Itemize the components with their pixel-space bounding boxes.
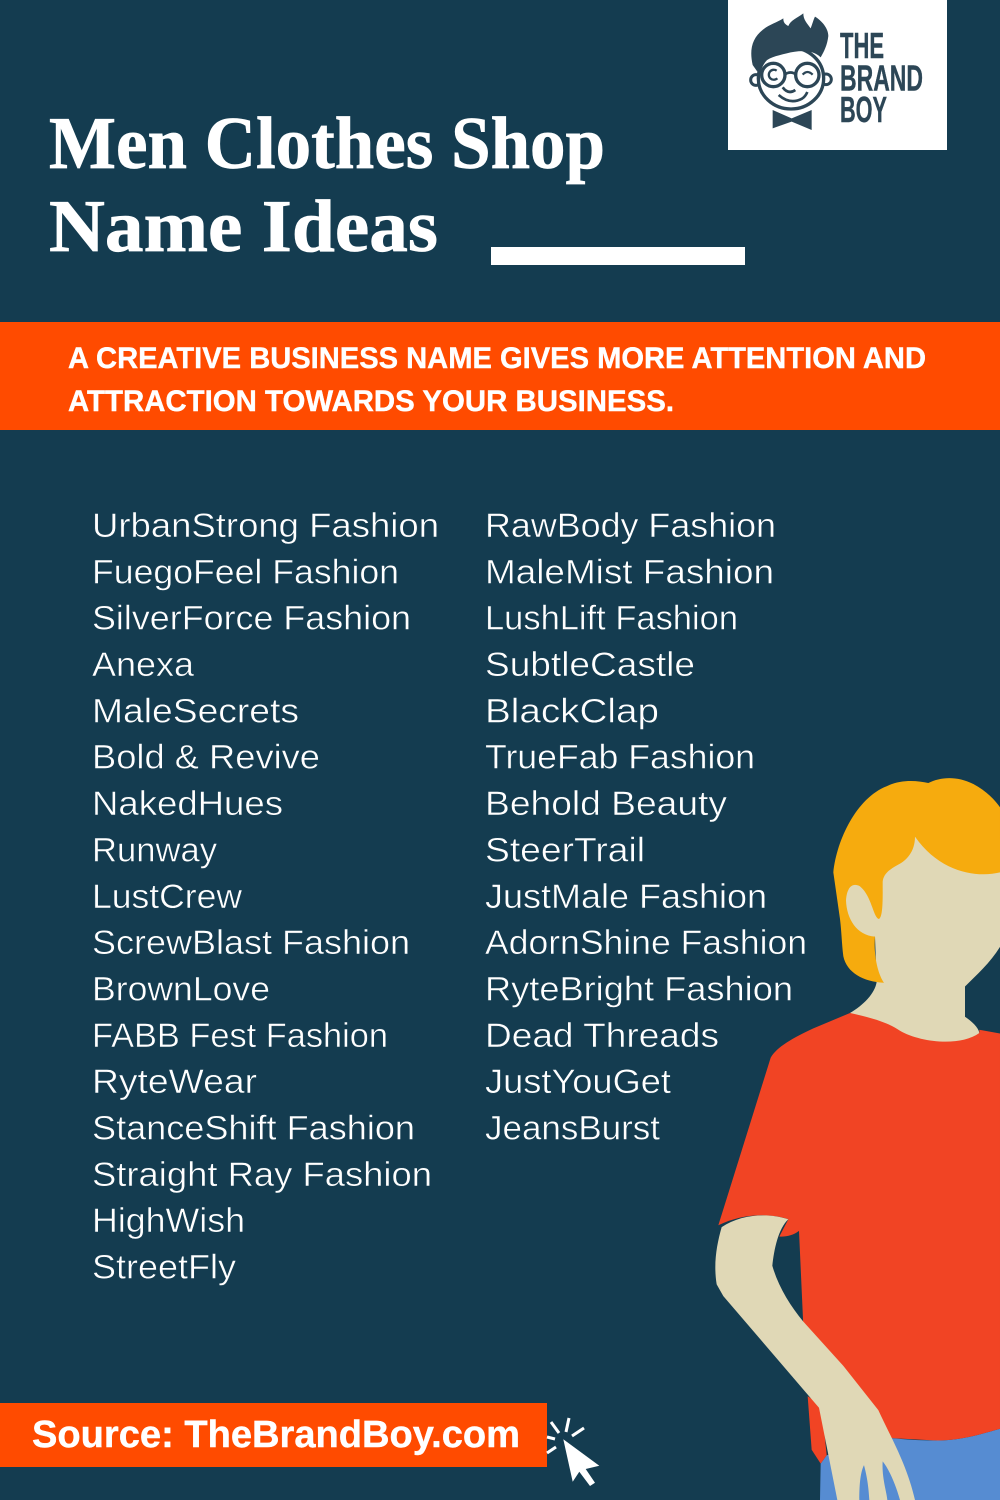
icon: click cursor [547,1418,599,1486]
name list: left column: Bold & Revive [92,739,320,777]
name list: right column: RyteBright Fashion [485,970,793,1008]
name list: right column: TrueFab Fashion [485,739,755,777]
title: Name Ideas [49,186,438,268]
name list: left column [92,507,439,1287]
title [49,103,605,268]
name list: left column: HighWish [92,1202,245,1240]
banner: creative business name message: A CREATIVE BUSINESS NAME GIVES MORE ATTENTION AND [68,342,926,375]
logo wordmark: BRAND [840,58,923,98]
banner: creative business name message: ATTRACTION TOWARDS YOUR BUSINESS. [68,385,674,418]
title underline bar [491,247,745,265]
logo panel [728,0,947,150]
name list: right column: RawBody Fashion [485,507,776,545]
name list: left column: NakedHues [92,785,283,823]
name list: left column: UrbanStrong Fashion [92,507,439,545]
name list: right column: JustMale Fashion [485,878,767,916]
name list: right column: AdornShine Fashion [485,924,807,962]
name list: right column: Behold Beauty [485,785,727,823]
name list: left column: LustCrew [92,878,242,916]
title: Men Clothes Shop [49,103,605,185]
name list: left column: SilverForce Fashion [92,600,411,638]
name list: right column: SteerTrail [485,831,645,869]
name list: left column: FABB Fest Fashion [92,1017,388,1055]
name list: left column: RyteWear [92,1063,257,1101]
name list: left column: StanceShift Fashion [92,1110,415,1148]
name list: left column: Anexa [92,646,194,684]
banner: creative business name message [0,322,1000,430]
name list: right column: BlackClap [485,692,659,730]
illustration: man in red t-shirt [715,778,1000,1500]
logo wordmark [840,25,923,130]
name list: left column: BrownLove [92,970,270,1008]
name list: left column: MaleSecrets [92,692,299,730]
icon: brand boy mascot [751,13,831,130]
name list: left column: FuegoFeel Fashion [92,553,399,591]
source bar: Source: TheBrandBoy.com [32,1414,520,1456]
name list: right column: LushLift Fashion [485,600,738,638]
name list: right column: JustYouGet [485,1063,672,1101]
name list: right column: SubtleCastle [485,646,695,684]
logo wordmark: BOY [840,89,887,130]
source bar [0,1403,547,1467]
name list: right column: Dead Threads [485,1017,719,1055]
logo wordmark: THE [840,25,884,66]
name list: left column: Straight Ray Fashion [92,1156,432,1194]
name list: right column: JeansBurst [485,1110,661,1148]
name list: right column: MaleMist Fashion [485,553,774,591]
name list: right column [485,507,807,1148]
name list: left column: Runway [92,831,217,869]
name list: left column: StreetFly [92,1249,236,1287]
name list: left column: ScrewBlast Fashion [92,924,410,962]
